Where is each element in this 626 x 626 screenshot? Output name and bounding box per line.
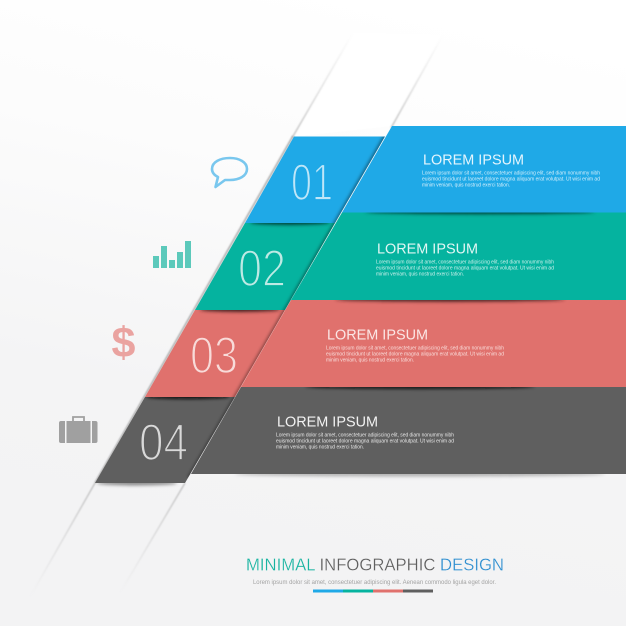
icon: bar chart	[153, 241, 191, 268]
band 01: euismod tincidunt ut laoreet dolore magna aliquam erat volutpat. Ut wisi enim ad	[422, 176, 600, 182]
tab 02	[195, 220, 335, 310]
band 04: minim veniam, quis nostrud exerci tation.	[276, 444, 364, 450]
tab 03	[145, 307, 285, 397]
band 03: Lorem ipsum dolor sit amet, consectetuer adipiscing elit, sed diam nonummy nibh	[326, 346, 504, 352]
panel: right bands	[191, 126, 626, 474]
band 02: Lorem ipsum dolor sit amet, consectetuer adipiscing elit, sed diam nonummy nibh	[376, 260, 554, 266]
shadow under last tab	[97, 480, 177, 486]
paper strip behind the bands	[30, 33, 443, 597]
band 02: LOREM IPSUM	[377, 240, 478, 258]
band 02	[291, 210, 626, 300]
tab 03: 03	[190, 327, 238, 385]
band 03: LOREM IPSUM	[327, 326, 428, 344]
band 04: Lorem ipsum dolor sit amet, consectetuer adipiscing elit, sed diam nonummy nibh	[276, 432, 454, 438]
band 03: euismod tincidunt ut laoreet dolore magna aliquam erat volutpat. Ut wisi enim ad	[326, 352, 504, 358]
shadow under last band	[236, 474, 604, 478]
panel: left number tabs	[95, 128, 390, 483]
band 02: euismod tincidunt ut laoreet dolore magna aliquam erat volutpat. Ut wisi enim ad	[376, 266, 554, 272]
fold shadow along the bands	[189, 128, 390, 478]
band 01: Lorem ipsum dolor sit amet, consectetuer adipiscing elit, sed diam nonummy nibh	[422, 170, 600, 176]
tab 04: 04	[139, 414, 188, 472]
colour key bar	[313, 590, 433, 592]
icon: dollar sign: $	[112, 319, 136, 367]
band 01: minim veniam, quis nostrud exerci tation.	[422, 182, 510, 188]
band 03	[241, 297, 626, 387]
tab 01: 01	[291, 154, 333, 212]
tab 01	[245, 136, 385, 223]
tab 02: 02	[238, 240, 286, 298]
band 02: minim veniam, quis nostrud exerci tation.	[376, 272, 464, 278]
band 04	[191, 384, 626, 474]
icon: briefcase	[59, 417, 98, 443]
band 04: LOREM IPSUM	[277, 414, 378, 430]
tab 04	[95, 394, 235, 483]
band 01: LOREM IPSUM	[423, 152, 524, 168]
band 01	[342, 126, 626, 212]
title: MINIMAL INFOGRAPHIC DESIGN	[246, 554, 504, 574]
band 04: euismod tincidunt ut laoreet dolore magna aliquam erat volutpat. Ut wisi enim ad	[276, 438, 454, 444]
band 03: minim veniam, quis nostrud exerci tation.	[326, 358, 414, 364]
subtitle: Lorem ipsum dolor sit amet, consectetuer adipiscing elit. Aenean commodo ligula eget dolor.	[253, 580, 496, 586]
icon: speech bubble	[212, 158, 247, 187]
